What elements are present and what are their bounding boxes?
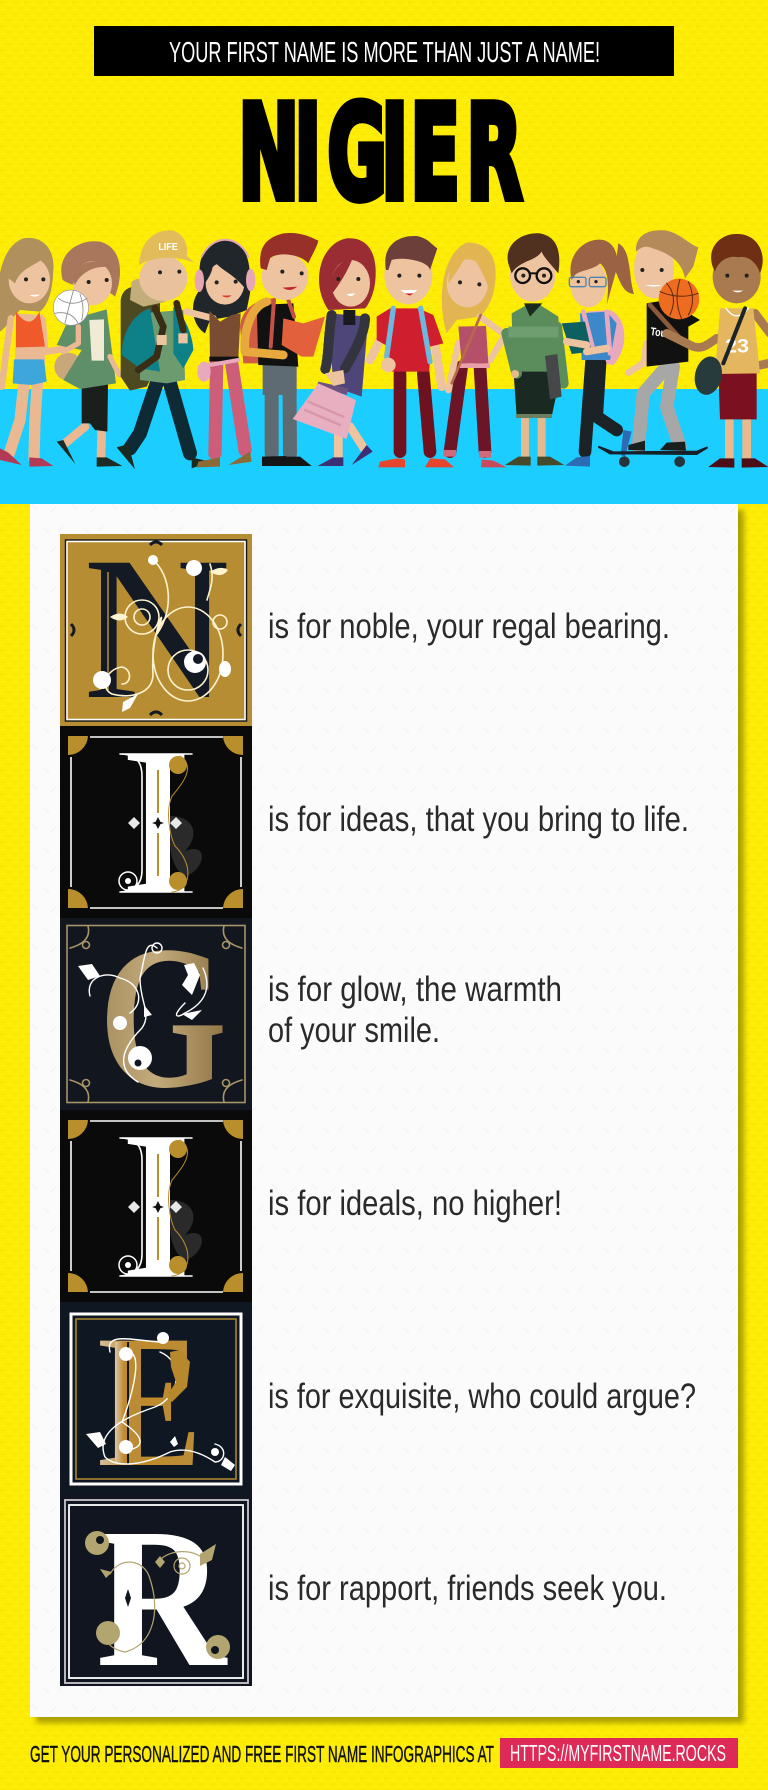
white card — [30, 504, 738, 1717]
person: blonde girl — [442, 243, 507, 467]
tile: letter E — [60, 1297, 252, 1507]
person: skater with basketball — [598, 230, 708, 467]
letter: N — [83, 515, 231, 742]
tile: letter R — [60, 1488, 252, 1709]
text: G: is for glow, the warmth — [268, 970, 562, 1009]
person: boy in red shirt — [370, 236, 454, 467]
flourishes — [103, 1339, 224, 1464]
corner ornaments — [70, 926, 242, 1102]
group of people right — [370, 230, 768, 468]
tile: letter I — [60, 706, 252, 938]
person: girl with headphones — [187, 240, 255, 467]
person: girl with pink case — [293, 238, 376, 466]
people illustration — [0, 230, 768, 469]
letter: I — [120, 706, 192, 938]
tile: letter N — [60, 515, 252, 742]
tile: letter G — [60, 904, 252, 1131]
flourishes — [85, 1531, 109, 1555]
letter: E — [95, 1297, 203, 1507]
person: boy with jersey and bag: 23 — [725, 337, 749, 358]
person: skater with basketball: Touch — [650, 326, 677, 342]
letter: G — [99, 904, 227, 1131]
person: girl in orange top — [0, 238, 68, 467]
card shadow — [36, 510, 744, 1723]
decorative smoke — [170, 1200, 202, 1260]
person: boy with jersey and bag — [667, 234, 768, 468]
decorative smoke — [170, 816, 202, 876]
flourishes — [89, 943, 207, 1082]
blue floor band — [0, 389, 768, 504]
person: boy with book — [240, 233, 325, 466]
text: G: of your smile. — [268, 1011, 440, 1050]
title: NIGIER — [238, 77, 522, 229]
person: girl with volleyball — [53, 241, 122, 467]
text: I: is for ideas, that you bring to life. — [268, 800, 689, 839]
text: I: is for ideals, no higher! — [268, 1184, 562, 1223]
person: hiker with cap and backpack — [117, 230, 210, 469]
flourishes — [105, 560, 227, 701]
text: N: is for noble, your regal bearing. — [268, 607, 670, 646]
letter: R — [96, 1488, 228, 1709]
text: G — [268, 970, 562, 1050]
person: girl with tablet — [562, 240, 634, 467]
person: hiker with cap and backpack: LIFE — [158, 242, 178, 253]
text: R: is for rapport, friends seek you. — [268, 1569, 667, 1608]
group of people left — [0, 230, 376, 469]
person: boy with glasses — [505, 233, 564, 466]
header banner — [94, 26, 674, 76]
tile: letter I — [60, 1090, 252, 1322]
letter: I — [120, 1090, 192, 1322]
